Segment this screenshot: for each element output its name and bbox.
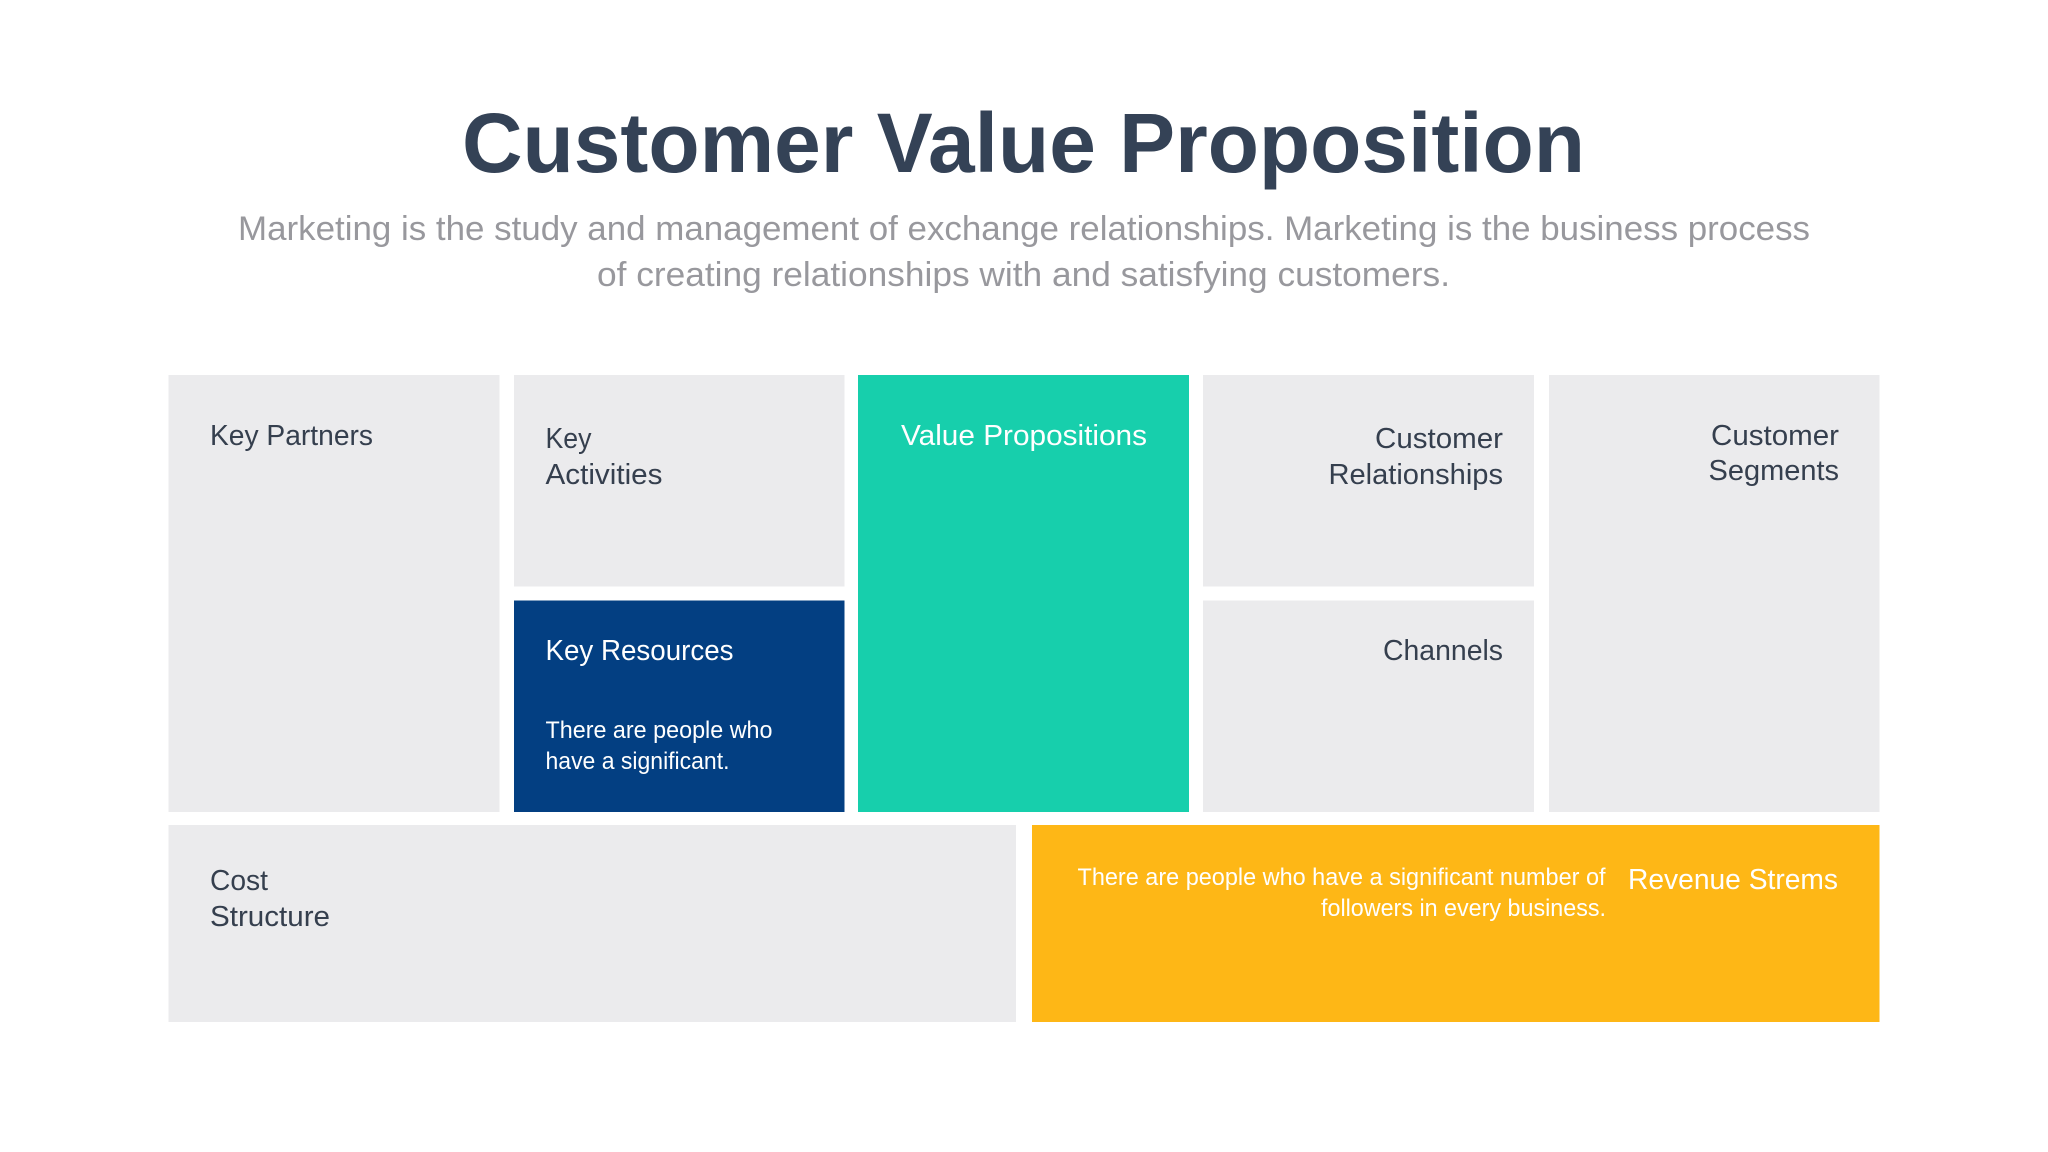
panel: key activities	[514, 375, 844, 586]
panel: key partners: Key Partners	[210, 420, 373, 452]
subtitle: Marketing is the study and management of exchange relationships. Marketing is the business process	[238, 210, 1810, 248]
subtitle: of creating relationships with and satisfying customers.	[597, 256, 1450, 294]
panel: customer relationships: Customer	[1375, 423, 1503, 455]
panel: cost structure: Structure	[210, 901, 330, 933]
panel: key partners	[168, 375, 500, 812]
panel: value propositions: Value Propositions	[901, 420, 1147, 452]
title: Customer Value Proposition	[462, 96, 1585, 190]
panel: key resources: There are people who	[546, 717, 772, 744]
panel: revenue streams: followers in every business.	[1321, 895, 1606, 922]
panel: customer segments: Customer	[1711, 420, 1839, 452]
panel: key activities: Activities	[546, 459, 662, 491]
panel: customer segments	[1549, 375, 1880, 812]
panel: channels: Channels	[1383, 635, 1503, 667]
panel: revenue streams: Revenue Strems	[1628, 864, 1838, 896]
panel: cost structure	[168, 825, 1016, 1022]
panel: key resources: have a significant.	[546, 748, 730, 775]
panel: customer segments: Segments	[1708, 455, 1839, 487]
panel: key activities: Key	[546, 423, 592, 455]
panel: customer relationships: Relationships	[1328, 459, 1503, 491]
panel: cost structure: Cost	[210, 865, 268, 897]
subtitle	[238, 210, 1810, 294]
panel: channels	[1203, 600, 1534, 812]
panel: key resources: Key Resources	[546, 635, 734, 667]
panel: value propositions	[858, 375, 1189, 812]
panel: revenue streams: There are people who have a significant number of	[1078, 864, 1606, 891]
panel: key resources	[514, 600, 844, 812]
panel: revenue streams	[1032, 825, 1880, 1022]
panel: customer relationships	[1203, 375, 1534, 586]
